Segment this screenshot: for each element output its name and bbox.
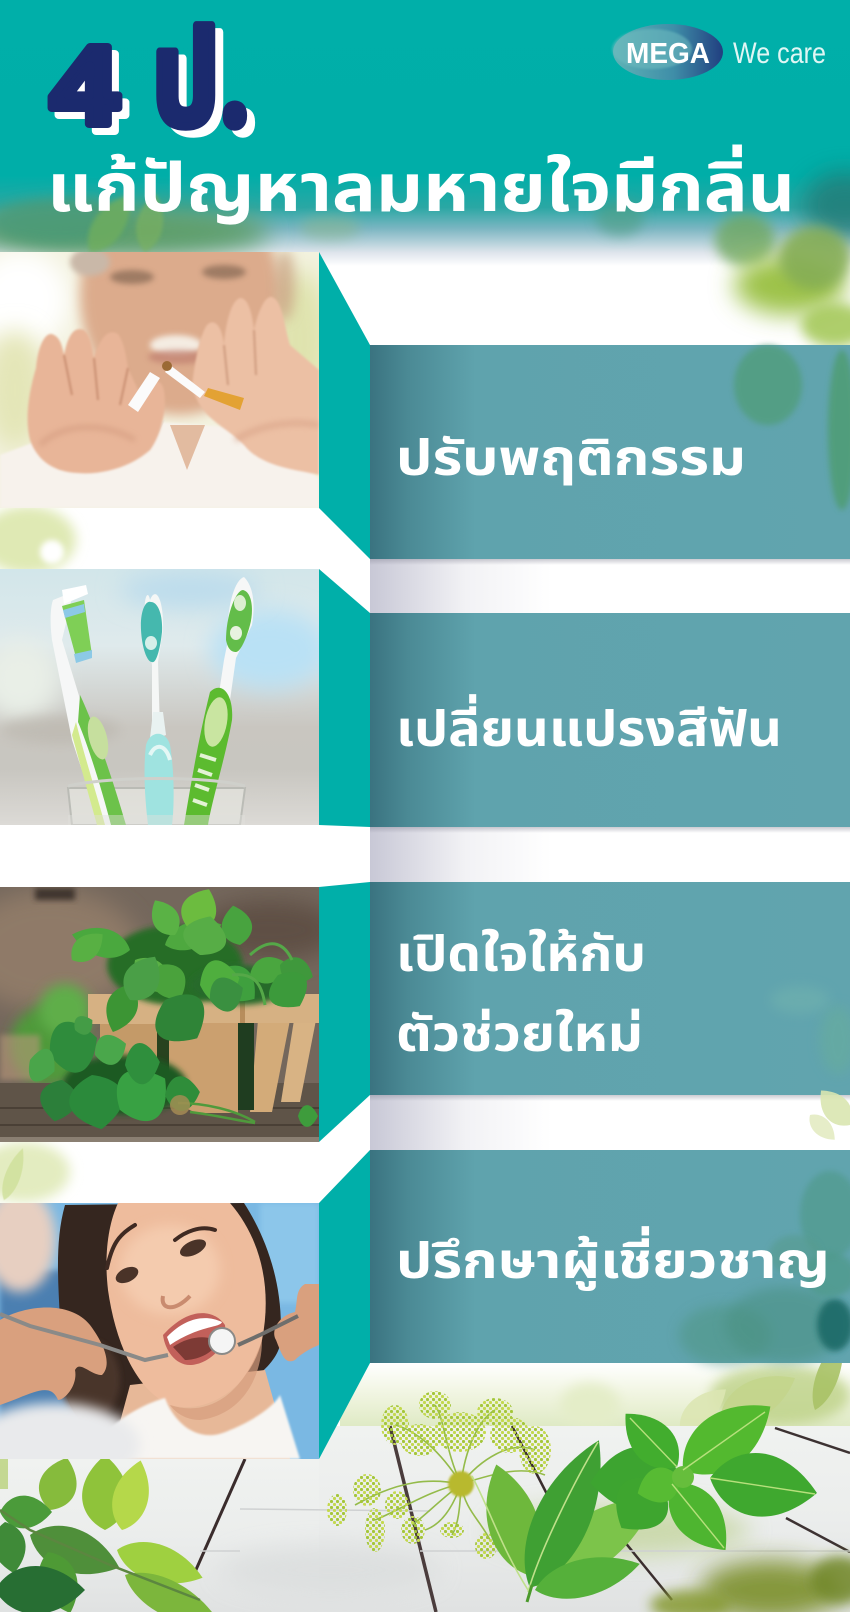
title: 4 ป. <box>50 0 258 193</box>
shirt <box>0 420 319 508</box>
bokeh strip above table <box>340 1331 850 1438</box>
herb: mint sprig <box>588 1384 821 1564</box>
brows and eyes <box>107 1225 215 1268</box>
face <box>106 1203 266 1384</box>
step 3 label: เปิดใจให้กับ <box>396 918 646 994</box>
blurred foreground foliage bottom right <box>650 1556 850 1612</box>
dentist sleeve <box>0 1394 139 1459</box>
left hand <box>28 329 165 473</box>
step 3 label <box>396 918 646 1074</box>
photo: dentist check-up <box>0 1203 319 1459</box>
header blurred foliage <box>0 171 850 347</box>
neck <box>110 1370 290 1459</box>
right brush <box>218 577 254 700</box>
left pale foliage under third photo <box>0 1142 70 1203</box>
heading: subtitle: แก้ปัญหาลมหายใจมีกลิ่น <box>47 139 795 242</box>
wooden table <box>0 1426 850 1612</box>
right hand <box>192 297 319 475</box>
logo: MEGA We care: We care <box>733 37 826 70</box>
logo: MEGA We care: MEGA <box>626 38 710 70</box>
leaf overlay on panels right <box>679 345 850 1365</box>
hair <box>58 1203 281 1430</box>
panel: step 4 background <box>370 1150 850 1363</box>
panel: step 1 background <box>370 345 850 559</box>
title: 4 ป.: 4 <box>57 16 127 180</box>
mouth <box>163 1313 225 1365</box>
upper mint cluster <box>107 925 243 1005</box>
photo: mint in a wooden basket <box>0 882 340 1142</box>
bottom-left foliage <box>0 1459 212 1612</box>
lower mint cluster <box>63 1055 187 1115</box>
step 1 label: ปรับพฤติกรรม <box>396 422 746 498</box>
photo: toothbrushes in a glass <box>0 569 330 825</box>
panel: step 2 background <box>370 613 850 827</box>
sweater <box>98 1395 300 1459</box>
step 3 label: ตัวช่วยใหม่ <box>396 998 643 1074</box>
panel: step 3 background <box>370 882 850 1095</box>
step 2 label: เปลี่ยนแปรงสีฟัน <box>396 693 782 769</box>
glass <box>68 788 245 825</box>
left hand <box>0 1308 107 1405</box>
teal connector shapes <box>319 252 370 1459</box>
logo: MEGA We care <box>612 24 826 80</box>
herb: umbel flower <box>327 1391 551 1559</box>
gap shading between teal panels <box>370 559 850 1150</box>
title: 4 ป.: 4 <box>50 9 120 173</box>
right hand <box>274 1284 319 1361</box>
left pale foliage under first photo <box>0 506 76 574</box>
header teal band <box>0 0 850 266</box>
photo: breaking a cigarette <box>0 252 319 508</box>
instruments <box>0 1314 168 1360</box>
herb: tea leaves <box>472 1429 672 1608</box>
cigarette <box>128 372 160 412</box>
crate <box>100 1024 157 1061</box>
left brush <box>50 596 111 825</box>
middle brush <box>145 594 163 730</box>
step 4 label: ปรึกษาผู้เชี่ยวชาญ <box>396 1225 830 1301</box>
